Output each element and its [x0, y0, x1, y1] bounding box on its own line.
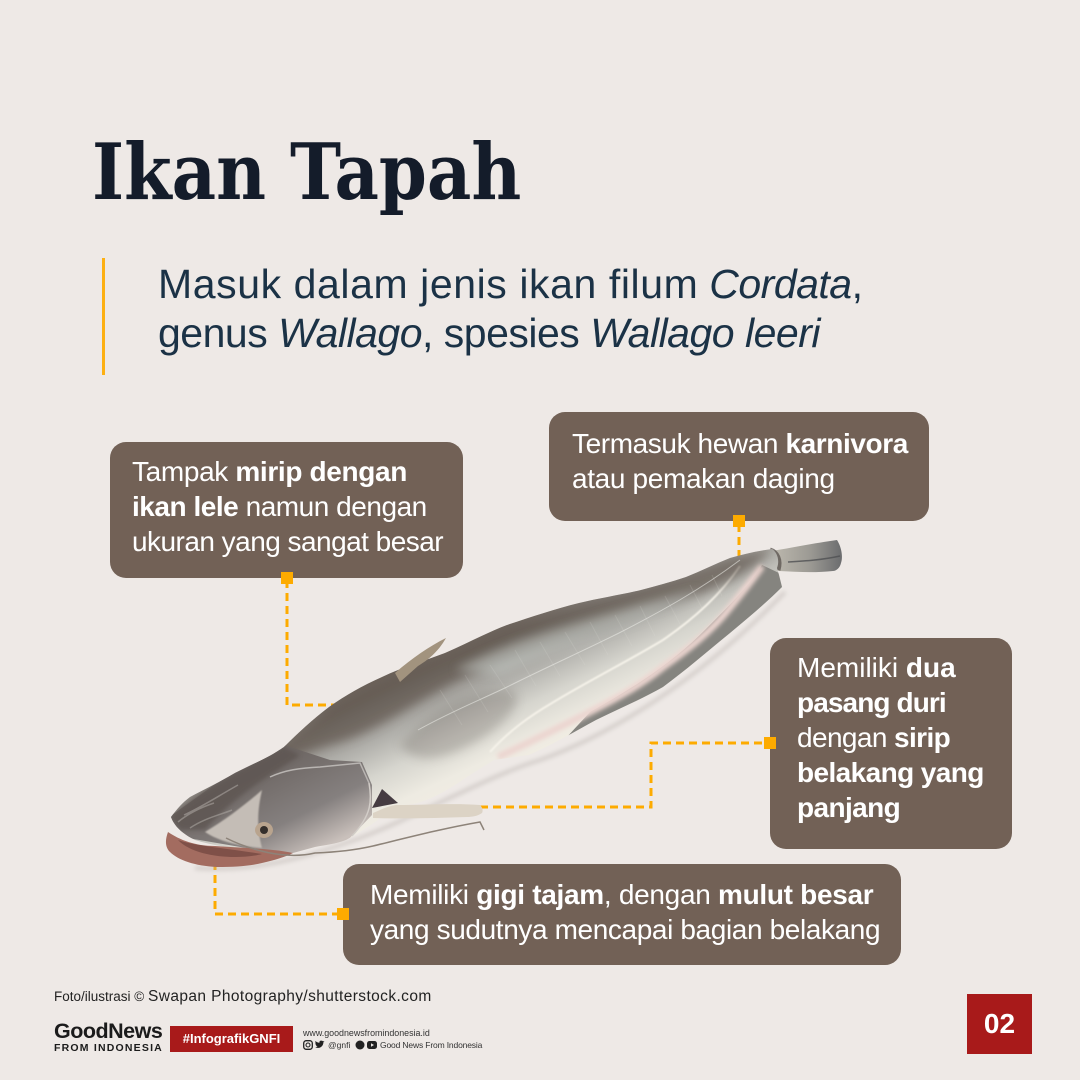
- grey flank patch: [400, 690, 516, 758]
- accent bar: [102, 258, 105, 375]
- callout: mirip ikan lele: ukuran yang sangat besar: [132, 526, 443, 557]
- head top mottling: [171, 747, 300, 830]
- gill dark patch: [372, 789, 398, 808]
- barbel whisker: [226, 822, 484, 855]
- back shading: [252, 550, 772, 764]
- pectoral fin: [373, 804, 483, 818]
- logo: GoodNews From Indonesia: GoodNews: [54, 1019, 162, 1043]
- lower jaw mouth: [166, 832, 293, 867]
- callout: mirip ikan lele: Tampak mirip dengan: [132, 456, 407, 487]
- mouth interior: [178, 840, 262, 857]
- photo credit: Foto/ilustrasi © Swapan Photography/shutterstock.com: [54, 988, 432, 1005]
- callout: gigi tajam: Memiliki gigi tajam, dengan mulut besar: [370, 879, 873, 910]
- white fin line: [490, 566, 740, 752]
- callout: dua pasang duri: Memiliki dua: [797, 652, 956, 683]
- callout: dua pasang duri: belakang yang: [797, 757, 984, 788]
- connector node: mirip lele: [281, 572, 293, 584]
- pink stripe: [498, 566, 762, 757]
- callout: gigi tajam: [343, 864, 901, 965]
- website and social links: Good News From Indonesia: [380, 1040, 482, 1050]
- callout: gigi tajam: yang sudutnya mencapai bagian belakang: [370, 914, 880, 945]
- soft shadow: [195, 592, 785, 869]
- body: [171, 549, 782, 848]
- callout: dua pasang duri: [770, 638, 1012, 849]
- website and social links: www.goodnewsfromindonesia.id: [303, 1028, 430, 1038]
- hashtag badge: #InfografikGNFI: [183, 1031, 280, 1046]
- connector node: gigi tajam: [337, 908, 349, 920]
- website and social links: @gnfi: [328, 1040, 350, 1050]
- silver sheen: [455, 590, 700, 675]
- connector node: karnivora: [733, 515, 745, 527]
- hashtag badge: [170, 1026, 293, 1052]
- dorsal fin: [395, 638, 446, 682]
- website and social links: [303, 1028, 482, 1050]
- gill cover line: [270, 763, 369, 783]
- logo: GoodNews From Indonesia: FROM INDONESIA: [54, 1042, 163, 1054]
- head: [165, 745, 372, 856]
- callout: dua pasang duri: dengan sirip: [797, 722, 950, 753]
- page number badge: [967, 994, 1032, 1054]
- pupil: [260, 826, 268, 834]
- callout: mirip ikan lele: [110, 442, 463, 578]
- callout: dua pasang duri: pasang duri: [797, 687, 946, 718]
- scale streaks: [440, 575, 722, 725]
- lateral line: [418, 560, 740, 730]
- fish: [166, 540, 842, 872]
- callout: karnivora: [549, 412, 929, 521]
- cheek highlight: [205, 790, 262, 848]
- callout: karnivora: Termasuk hewan karnivora: [572, 428, 908, 459]
- logo: GoodNews From Indonesia: [54, 1019, 163, 1054]
- subtitle: Masuk dalam jenis ikan filum Cordata,: [158, 261, 863, 307]
- tail fin: [770, 540, 842, 572]
- callout: karnivora: atau pemakan daging: [572, 463, 835, 494]
- subtitle: [158, 261, 863, 356]
- callout: dua pasang duri: panjang: [797, 792, 900, 823]
- page number badge: 02: [984, 1008, 1015, 1039]
- subtitle: genus Wallago, spesies Wallago leeri: [158, 310, 820, 356]
- eye: [255, 822, 273, 838]
- anal fin: [566, 565, 786, 738]
- title: Ikan Tapah: [92, 127, 521, 218]
- callout: mirip ikan lele: ikan lele namun dengan: [132, 491, 427, 522]
- connector node: duri dan sirip: [764, 737, 776, 749]
